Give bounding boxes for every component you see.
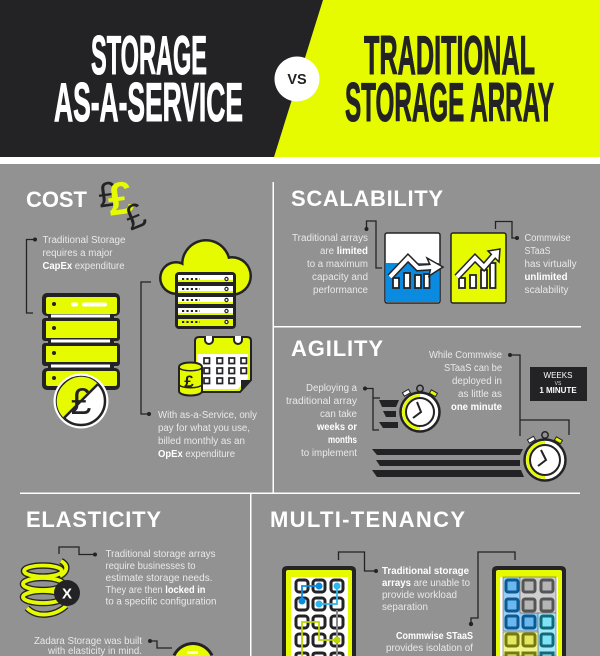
icon: cloud server — [159, 239, 252, 329]
header banner: AS-A-SERVICE — [54, 71, 243, 133]
text: traditional separation: arrays are unable to — [382, 578, 470, 589]
icon: speed lines small — [379, 400, 399, 428]
text: zadara elasticity: Zadara Storage was built — [34, 636, 142, 647]
text: zadara elasticity — [34, 636, 142, 656]
text: commwise one minute: deployed in — [452, 376, 502, 387]
icon: large stopwatch — [524, 432, 566, 480]
icon: phone with isolated workloads — [492, 566, 566, 656]
text: traditional separation: provide workload — [382, 590, 457, 601]
header banner — [0, 0, 600, 164]
icon: money barrel: £ — [184, 372, 194, 391]
title: storage as-a-service — [54, 24, 243, 133]
callout: weeks vs 1 minute: VS — [555, 381, 562, 387]
panel: multi-tenancy — [270, 507, 566, 656]
panel: agility — [286, 336, 587, 480]
heading: scalability: SCALABILITY — [291, 186, 443, 211]
text: traditional capex: CapEx expenditure — [42, 261, 125, 272]
text: traditional separation: Traditional storage — [382, 566, 469, 577]
text: traditional weeks or months — [286, 383, 357, 459]
text: commwise unlimited — [524, 233, 576, 296]
text: traditional separation — [382, 566, 470, 613]
text: as-a-service opex: billed monthly as an — [158, 436, 245, 447]
text: traditional weeks or months: Deploying a — [306, 383, 357, 394]
text: traditional locked in: require businesses to — [106, 561, 196, 572]
icon: money barrel — [179, 362, 202, 396]
connector: as-a-service opex — [141, 282, 151, 416]
title: storage as-a-service: STORAGE — [91, 24, 207, 86]
text: commwise isolation: provides isolation of — [386, 643, 473, 654]
text: traditional limited: are limited — [320, 246, 368, 257]
connector: traditional limited — [364, 221, 382, 268]
vs badge — [274, 56, 320, 102]
text: traditional locked in: They are then locked in — [106, 585, 206, 596]
text: commwise unlimited: unlimited — [524, 272, 568, 283]
text: traditional locked in: Traditional storage arrays — [106, 549, 216, 560]
callout: weeks vs 1 minute: 1 MINUTE — [539, 386, 577, 395]
text: commwise one minute: one minute — [451, 402, 502, 413]
text: traditional weeks or months: traditional array — [286, 396, 357, 407]
text: as-a-service opex: pay for what you use, — [158, 423, 250, 434]
text: traditional limited: to a maximum — [307, 259, 368, 270]
chart icon: capped blue — [385, 233, 443, 303]
text: commwise one minute — [429, 350, 502, 413]
heading: multi-tenancy: MULTI-TENANCY — [270, 507, 465, 532]
text: commwise isolation — [386, 631, 473, 654]
icon: pound signs: £ — [95, 174, 120, 215]
icon: spring with x: X — [62, 586, 72, 602]
text: as-a-service opex — [158, 410, 257, 460]
connector: traditional locked — [59, 547, 97, 556]
text: as-a-service opex: OpEx expenditure — [158, 449, 235, 460]
heading: agility: AGILITY — [291, 336, 383, 361]
text: commwise unlimited: has virtually — [524, 259, 576, 270]
title: traditional storage array — [345, 24, 554, 133]
connector: traditional weeks — [363, 386, 380, 430]
panel: cost — [26, 171, 257, 460]
icon: server stack with crossed pound — [42, 293, 120, 428]
connector: traditional capex — [26, 238, 37, 313]
icon: pound signs: £ — [119, 195, 151, 238]
text: as-a-service opex: With as-a-Service, only — [158, 410, 257, 421]
icon: speed lines large — [372, 449, 524, 477]
icon: spring with x — [23, 561, 80, 615]
connector: zadara elasticity — [148, 639, 172, 648]
icon: elastic circle — [174, 643, 212, 656]
text: traditional limited: capacity and — [312, 272, 368, 283]
text: traditional capex: Traditional Storage — [42, 235, 126, 246]
text: commwise unlimited: STaaS — [524, 246, 551, 257]
icon: crossed pound: £ — [71, 381, 91, 422]
text: commwise unlimited: scalability — [524, 285, 568, 296]
icon: pound signs — [95, 171, 151, 238]
text: commwise one minute: While Commwise — [429, 350, 502, 361]
heading: elasticity: ELASTICITY — [26, 507, 161, 532]
text: traditional capex: requires a major — [42, 248, 113, 259]
connector: commwise isolation — [469, 552, 515, 626]
connector: commwise unlimited — [496, 222, 519, 240]
connector: traditional separation — [338, 552, 378, 573]
vs badge: VS — [287, 72, 307, 88]
chart icon: rising yellow — [451, 233, 506, 303]
text: traditional capex — [42, 235, 126, 272]
text: traditional weeks or months: months — [328, 435, 357, 446]
text: commwise one minute: STaaS can be — [444, 363, 502, 374]
text: traditional weeks or months: weeks or — [316, 422, 357, 433]
text: traditional weeks or months: can take — [320, 409, 357, 420]
icon: pound signs: £ — [104, 171, 137, 226]
text: traditional limited: Traditional arrays — [292, 233, 368, 244]
text: traditional weeks or months: to implement — [301, 448, 357, 459]
panel: elasticity — [23, 507, 216, 656]
text: traditional locked in: to a specific configuration — [106, 596, 216, 608]
text: traditional locked in — [106, 549, 216, 608]
text: traditional limited: performance — [313, 285, 368, 296]
text: traditional locked in: estimate storage needs. — [106, 573, 212, 584]
connector: commwise one minute — [508, 353, 569, 436]
text: commwise unlimited: Commwise — [524, 233, 571, 244]
heading: cost: COST — [26, 187, 88, 212]
icon: small stopwatch — [400, 385, 440, 432]
text: commwise one minute: as little as — [458, 389, 502, 400]
panel: scalability — [291, 186, 576, 303]
text: traditional limited — [292, 233, 368, 296]
dividers — [20, 182, 581, 656]
text: traditional separation: separation — [382, 602, 428, 613]
icon: calendar — [195, 336, 251, 392]
text: commwise isolation: Commwise STaaS — [396, 631, 473, 642]
callout: weeks vs 1 minute — [530, 367, 587, 401]
callout: weeks vs 1 minute: WEEKS — [544, 371, 572, 380]
icon: phone with mixed workloads — [282, 566, 356, 656]
